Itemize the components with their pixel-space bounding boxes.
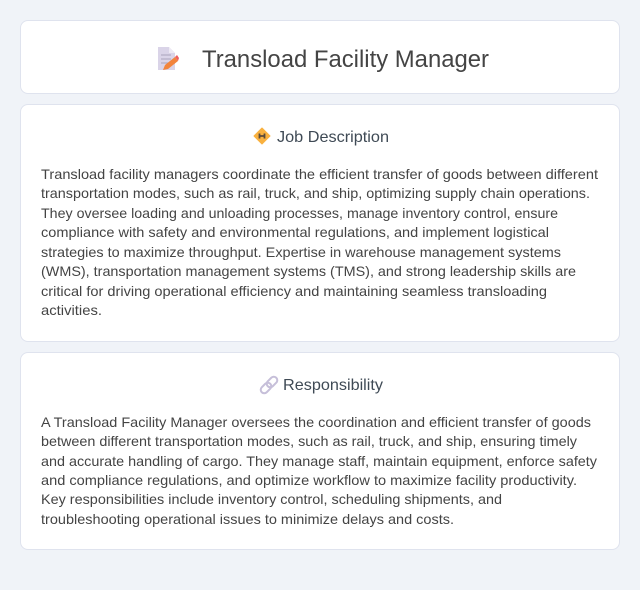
panel: title card [20, 20, 620, 94]
text block: responsibility: between different transportation modes, such as rail, truck, and ship, ensuring timely [41, 433, 577, 449]
text block: responsibility: and accurate handling of cargo. They manage staff, maintain equipment, enforce safety [41, 453, 597, 469]
title: Transload Facility Manager [202, 46, 489, 73]
text block: responsibility: troubleshooting operational issues to minimize delays and costs. [41, 511, 454, 527]
icon: chain link [259, 375, 279, 395]
text block: responsibility [41, 414, 597, 527]
text block: responsibility: A Transload Facility Manager oversees the coordination and efficient transfer of goods [41, 414, 591, 430]
text block: job description: strategies to maximize throughput. Expertise in warehouse management systems [41, 244, 561, 260]
heading: job description: Job Description [277, 129, 389, 146]
heading: responsibility: Responsibility [283, 377, 383, 394]
text block: responsibility: and compliance regulations, and optimize workflow to maximize facility productivity. [41, 472, 577, 488]
text block: job description: transportation modes, such as rail, truck, and ship, optimizing supply chain operations. [41, 185, 590, 201]
text block: job description: compliance with safety and environmental regulations, and implement logistical [41, 224, 549, 240]
text block: job description [41, 166, 598, 318]
text block: job description: They oversee loading and unloading processes, manage inventory control, ensure [41, 205, 558, 221]
text block: responsibility: Key responsibilities include inventory control, scheduling shipments, and [41, 491, 502, 507]
icon: document with pencil [158, 47, 179, 70]
text block: job description: (WMS), transportation management systems (TMS), and strong leadership skills are [41, 263, 576, 279]
text block: job description: Transload facility managers coordinate the efficient transfer of goods between different [41, 166, 598, 182]
panel: responsibility card [20, 352, 620, 550]
panel: job description card [20, 104, 620, 342]
text block: job description: critical for driving operational efficiency and maintaining seamless transloading [41, 283, 547, 299]
text block: job description: activities. [41, 302, 102, 318]
heading: responsibility [259, 375, 383, 395]
icon: construction diamond [254, 128, 270, 144]
